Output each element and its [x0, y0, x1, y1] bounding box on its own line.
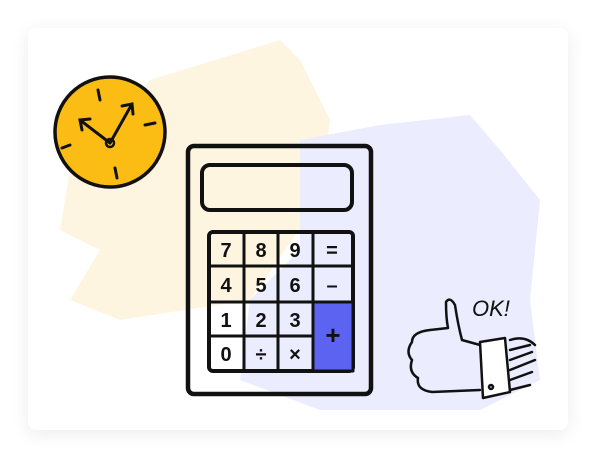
keypad: = — [326, 240, 338, 262]
icon: clock — [55, 77, 165, 187]
icon: calculator — [188, 146, 371, 394]
keypad: 0 — [220, 344, 232, 366]
keypad — [209, 232, 353, 371]
keypad: ÷ — [256, 344, 267, 366]
keypad: – — [326, 275, 338, 297]
brush: purple — [240, 115, 540, 410]
brush: yellow — [60, 40, 330, 320]
keypad: 5 — [255, 275, 267, 297]
card background — [28, 28, 568, 430]
keypad: 7 — [220, 240, 232, 262]
keypad: 2 — [255, 310, 267, 332]
keypad: 4 — [220, 275, 232, 297]
keypad: 1 — [220, 310, 232, 332]
display — [202, 165, 352, 210]
keypad: 3 — [289, 310, 301, 332]
keypad: 8 — [255, 240, 267, 262]
keypad: + — [325, 320, 341, 350]
keypad: × — [289, 344, 301, 366]
icon: thumbs up with OK — [408, 296, 535, 398]
icon: thumbs up with OK: OK! — [472, 296, 510, 321]
keypad: 9 — [289, 240, 301, 262]
keypad: 6 — [289, 275, 301, 297]
